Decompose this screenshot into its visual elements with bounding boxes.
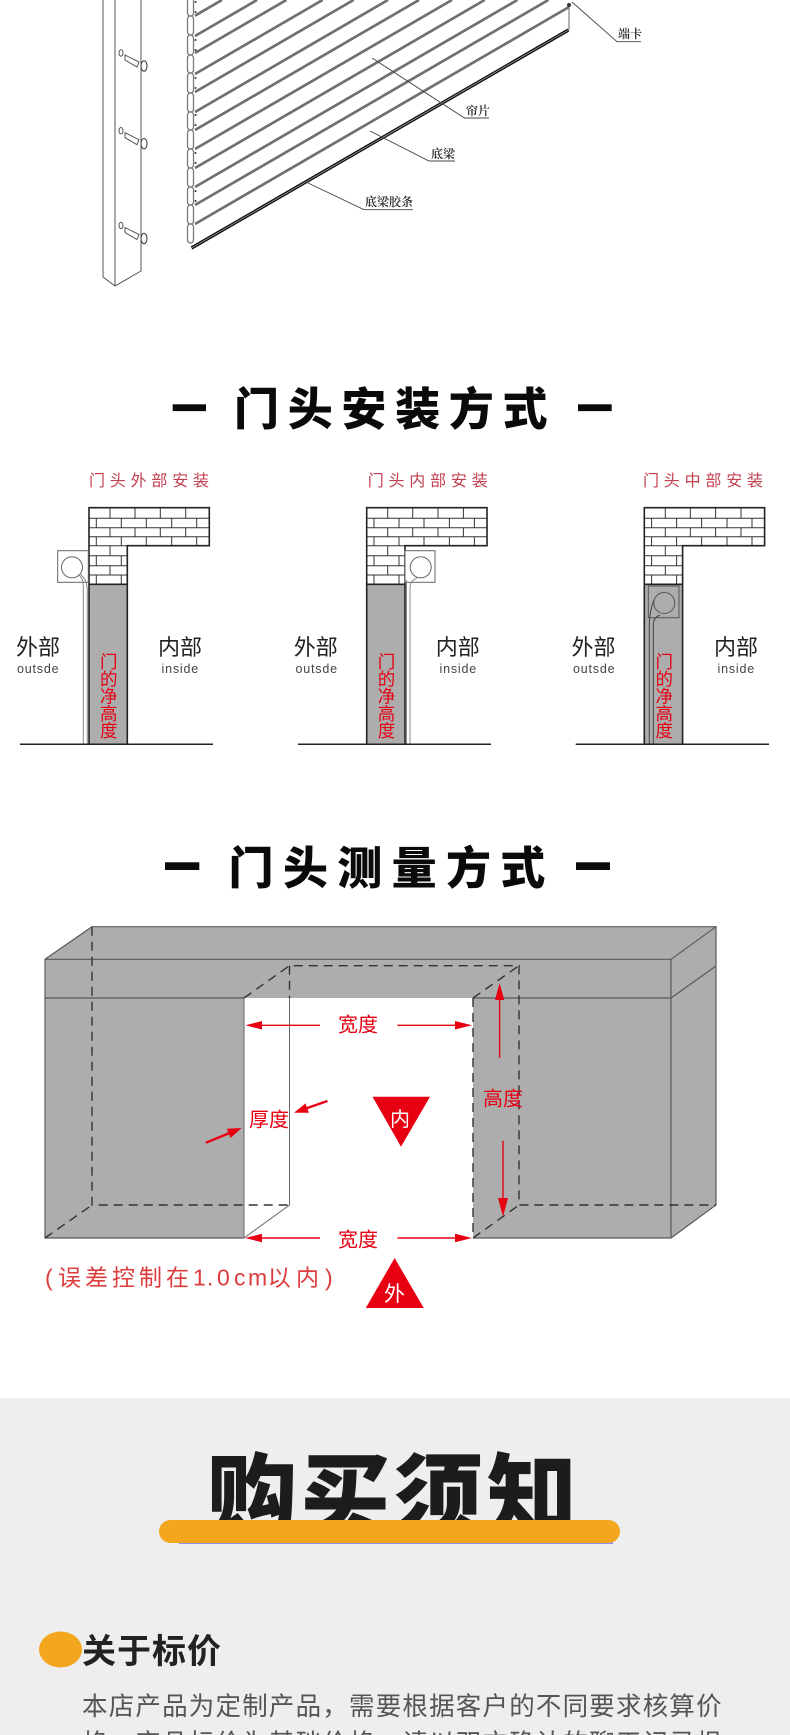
outside label	[572, 635, 616, 676]
outside label: outsde	[573, 662, 615, 676]
clear height label: 高	[378, 704, 395, 724]
inside label	[436, 635, 480, 676]
panel: roller door exploded drawing	[103, 0, 642, 286]
label: curtain slat: 帘片	[466, 103, 490, 118]
clear height label: 度	[100, 721, 118, 741]
clear height label: 高	[656, 704, 673, 724]
inside label: 内部	[158, 635, 202, 660]
outside label: 外部	[16, 635, 60, 660]
label: end clip: 端卡	[618, 26, 642, 41]
wall and door opening	[367, 508, 487, 744]
roller box	[405, 551, 435, 744]
width dimension top	[245, 1014, 472, 1036]
clear height label: 门	[100, 652, 118, 672]
orange underline bar	[159, 1520, 620, 1544]
outside label: 外部	[294, 635, 338, 660]
inside label: inside	[440, 662, 477, 676]
label: bottom beam rubber: 底梁胶条	[365, 194, 413, 209]
panel: middle mounting diagram	[572, 472, 769, 744]
clear height label: 高	[100, 704, 118, 724]
heading: measurement methods: 门头测量方式	[228, 843, 545, 894]
roller box	[58, 551, 88, 744]
clear height label: 的	[100, 670, 118, 690]
ground line	[298, 743, 491, 745]
inside marker triangle: 内	[390, 1108, 410, 1131]
width dimension top: 宽度	[338, 1014, 378, 1036]
ground line	[576, 743, 769, 745]
subtitle: 门头外部安装	[89, 472, 214, 490]
label: curtain slat	[372, 58, 490, 118]
height dimension: 高度	[483, 1088, 523, 1110]
wall and door opening	[89, 508, 209, 744]
heading: installation methods: 门头安装方式	[234, 384, 548, 435]
clear height label: 的	[656, 670, 673, 690]
outside marker triangle	[366, 1258, 424, 1308]
subtitle: 门头中部安装	[643, 472, 768, 490]
subtitle: 门头内部安装	[368, 472, 493, 490]
label: bottom beam	[370, 131, 456, 161]
body text	[82, 1693, 723, 1735]
outside label	[16, 635, 60, 676]
label: end clip	[572, 2, 642, 42]
roller box	[648, 586, 679, 744]
width dimension bottom	[245, 1228, 472, 1252]
big heading: 购买须知	[207, 1448, 577, 1548]
inside label: inside	[718, 662, 755, 676]
outside label: outsde	[17, 662, 59, 676]
inside marker triangle	[372, 1097, 430, 1147]
inside label	[158, 635, 202, 676]
outside marker triangle: 外	[384, 1283, 405, 1306]
outside label: outsde	[296, 662, 338, 676]
section heading: price note: 关于标价	[82, 1633, 222, 1671]
inside label: 内部	[714, 635, 758, 660]
hidden edges dashed	[45, 927, 716, 1238]
clear height label: 门	[656, 652, 673, 672]
thickness dimension	[206, 1101, 327, 1143]
inside label: inside	[162, 662, 199, 676]
outside label	[294, 635, 338, 676]
wall block	[45, 927, 716, 1240]
ground line	[20, 743, 213, 745]
tolerance note: (误差控制在1.0cm以内)	[45, 1264, 333, 1290]
panel: measurement 3D diagram	[45, 927, 716, 1308]
height dimension	[483, 983, 523, 1217]
curtain slats	[188, 0, 571, 243]
clear height label: 门	[378, 652, 395, 672]
clear height label: 净	[100, 687, 118, 707]
panel: inside mounting diagram	[294, 472, 493, 744]
side guide rail post	[103, 0, 147, 286]
clear height label: 的	[378, 670, 395, 690]
inside label	[714, 635, 758, 676]
clear height label: 净	[378, 687, 395, 707]
label: bottom beam rubber	[308, 183, 413, 210]
clear height label: 度	[656, 721, 673, 741]
bottom beam rubber strip	[192, 30, 568, 248]
body text: 本店产品为定制产品，需要根据客户的不同要求核算价	[82, 1693, 723, 1721]
inside label: 内部	[436, 635, 480, 660]
wall and door opening	[644, 508, 765, 744]
clear height label: 净	[656, 687, 673, 707]
clear height label: 度	[378, 721, 395, 741]
panel: purchase notice	[0, 1398, 790, 1735]
outside label: 外部	[572, 635, 616, 660]
label: bottom beam: 底梁	[431, 146, 456, 161]
width dimension bottom: 宽度	[338, 1228, 378, 1252]
thickness dimension: 厚度	[249, 1108, 289, 1132]
panel: outside mounting diagram	[16, 472, 214, 744]
